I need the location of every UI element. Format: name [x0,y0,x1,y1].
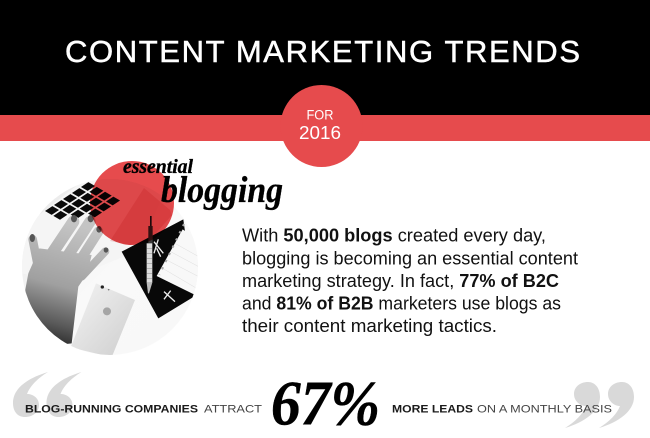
badge: for 2016: 2016 [299,123,341,143]
icon: keyboard keys [45,182,120,220]
header band [0,0,650,115]
callout: leads statistic right text: MORE LEADS [392,404,473,416]
red stripe [0,115,650,141]
big number: 67%: 67% [271,368,380,438]
text block: blogging statistics: marketing strategy. In fact, 77% of B2C [242,271,559,291]
text block: blogging statistics: With 50,000 blogs created every day, [242,226,546,246]
red circle overlay [90,161,174,245]
callout: leads statistic right text [392,404,612,416]
icon: laptop body [30,187,76,234]
icon: phone [71,283,135,357]
heading: essential blogging: blogging [161,170,283,211]
heading: essential blogging [123,156,283,211]
icon: notebook [122,219,199,318]
callout: leads statistic left text: BLOG-RUNNING COMPANIES [25,404,198,416]
callout: leads statistic right text: ON A MONTHLY BASIS [477,404,612,416]
icon: pen [147,216,153,293]
badge: for 2016 [280,85,362,167]
title: CONTENT MARKETING TRENDS [65,34,580,69]
badge: for 2016: FOR [306,108,334,122]
photo circle: desk with hand, keyboard, phone and notebook [20,170,200,358]
icon: left quote mark [13,372,82,417]
text block: blogging statistics: and 81% of B2B marketers use blogs as [242,294,561,314]
icon: hand [20,215,108,347]
heading: essential blogging: essential [123,156,193,178]
text block: blogging statistics: their content marketing tactics. [242,316,497,336]
icon: right quote mark [565,382,634,428]
text block: blogging statistics [242,226,578,336]
text block: blogging statistics: blogging is becoming an essential content [242,248,578,268]
callout: leads statistic left text [25,404,262,416]
callout: leads statistic left text: ATTRACT [204,404,262,416]
